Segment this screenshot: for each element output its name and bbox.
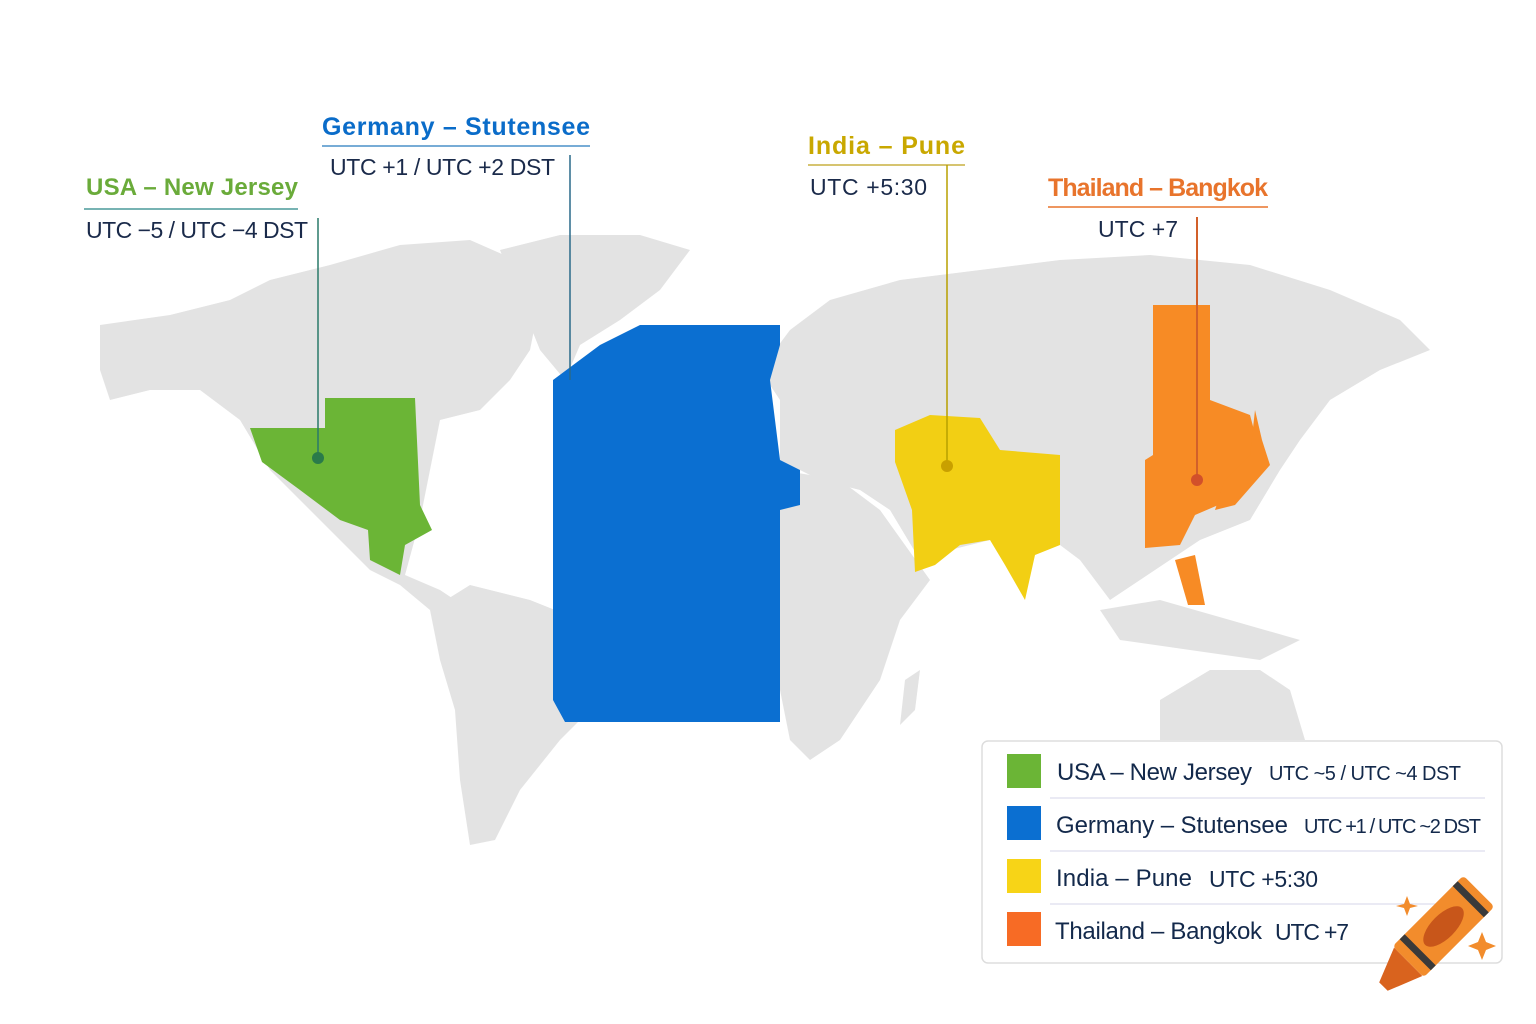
world map [100,235,1430,845]
legend row: germany [1007,806,1481,840]
legend row: thailand: Thailand – Bangkok [1055,918,1263,945]
region: thailand orange [1145,305,1270,605]
legend row: germany: UTC +1 / UTC ~2 DST [1304,816,1481,838]
callout: usa: USA – New Jersey [86,174,299,201]
legend row: thailand: UTC +7 [1275,919,1349,945]
indonesia [1100,600,1300,660]
greenland [500,235,690,380]
callout: germany: UTC +1 / UTC +2 DST [330,154,555,180]
europe asia [760,255,1430,600]
australia [1160,670,1305,740]
legend row: usa: USA – New Jersey [1057,759,1252,786]
callout: germany: Germany – Stutensee [322,113,590,141]
legend row: india: India – Pune [1056,865,1192,892]
africa [780,470,930,760]
icon: crayon [1368,876,1496,1002]
callout: india: India – Pune [808,132,965,160]
callout: india: UTC +5:30 [810,174,927,200]
legend row: germany: Germany – Stutensee [1056,812,1288,839]
madagascar [900,670,920,725]
callout: india [808,132,965,472]
legend row: usa: UTC ~5 / UTC ~4 DST [1269,763,1461,785]
callout: germany [322,113,590,380]
callout: thailand [1048,174,1268,486]
north america [100,240,540,610]
legend [982,741,1502,963]
legend row: india [1007,859,1318,893]
callout: usa [84,174,324,464]
callout: thailand: Thailand – Bangkok [1048,174,1268,202]
region: germany blue [553,325,800,722]
legend row: india: UTC +5:30 [1209,866,1318,892]
legend row: thailand [1007,912,1349,946]
legend row: usa [1007,754,1461,788]
south america [430,585,610,845]
callout: usa: UTC −5 / UTC −4 DST [86,217,308,243]
region: india yellow [895,415,1060,600]
region: usa green [250,398,432,575]
callout: thailand: UTC +7 [1098,216,1178,242]
